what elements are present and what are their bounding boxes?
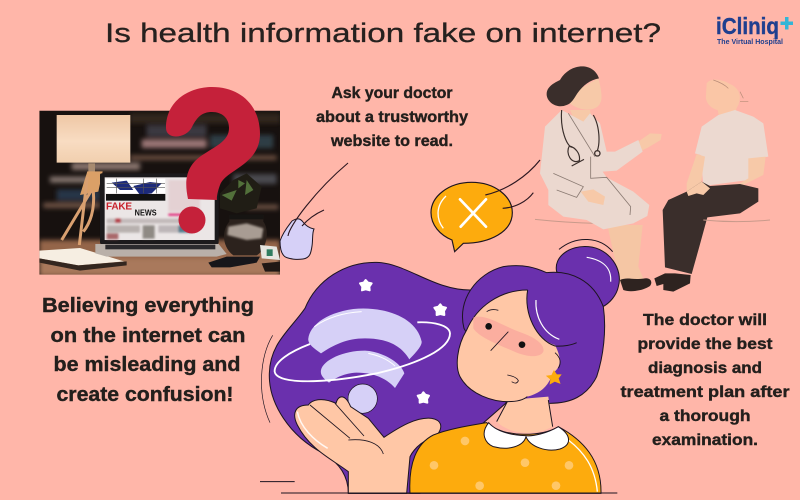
logo: iCliniq: iCliniq: [716, 13, 779, 39]
earring: [547, 371, 561, 384]
text: believing everything: on the internet can: [50, 325, 245, 347]
text: doctor will provide: The doctor will: [643, 312, 767, 329]
phone and box: [260, 245, 280, 260]
illustration: doctor and patient: [535, 66, 770, 292]
wifi arcs: [308, 309, 422, 388]
blush: [473, 317, 544, 356]
text: believing everything: be misleading and: [54, 354, 240, 376]
orbit ring: [275, 322, 450, 381]
photo: laptop with fake news on a desk: [39, 111, 280, 277]
top hair: [462, 266, 605, 403]
hair front strand: [527, 290, 577, 346]
icon: lilac speech bubble with tail lines: [280, 163, 348, 259]
illustration: confused woman with wifi symbol: [260, 239, 619, 493]
plant and vase: [220, 173, 262, 213]
title: Is health information fake on internet?: [105, 18, 661, 48]
hand: [295, 397, 441, 493]
wifi dot: [348, 384, 377, 413]
text: doctor will provide: treatment plan after: [620, 384, 790, 401]
text: believing everything: [42, 295, 254, 406]
photo: laptop with fake news on a desk: NEWS: [135, 207, 157, 217]
text: ask your doctor: Ask your doctor: [332, 85, 452, 102]
notebook: [39, 248, 124, 265]
question mark: [166, 87, 260, 200]
photo: laptop with fake news on a desk: FAKE: [106, 201, 132, 212]
sweater: [410, 423, 601, 493]
text: doctor will provide: examination.: [652, 432, 758, 449]
patient: [654, 80, 770, 292]
doctor: [535, 66, 662, 291]
text: doctor will provide: diagnosis and: [648, 360, 762, 377]
bun: [556, 247, 619, 307]
text: believing everything: create confusion!: [56, 384, 234, 406]
stars: [360, 280, 446, 403]
back hair: [269, 262, 513, 493]
face: [457, 290, 560, 402]
text: ask your doctor: about a trustworthy: [316, 109, 468, 126]
question mark dot: [178, 206, 206, 234]
lamp: [57, 115, 130, 163]
text: doctor will provide: [620, 312, 790, 449]
neck: [497, 397, 553, 433]
text: doctor will provide: a thorough: [660, 408, 750, 425]
logo: iCliniq: The Virtual Hospital: [717, 39, 783, 46]
text: ask your doctor: [316, 85, 468, 150]
text: ask your doctor: website to read.: [330, 133, 453, 150]
laptop: [100, 173, 219, 244]
collar: [484, 423, 569, 450]
motion lines and ground: [261, 335, 273, 423]
icon: orange speech bubble with cross: [431, 160, 540, 252]
text: doctor will provide: provide the best: [638, 336, 773, 353]
text: believing everything: Believing everything: [42, 295, 254, 317]
eyes, nose, mouth: [485, 310, 560, 383]
